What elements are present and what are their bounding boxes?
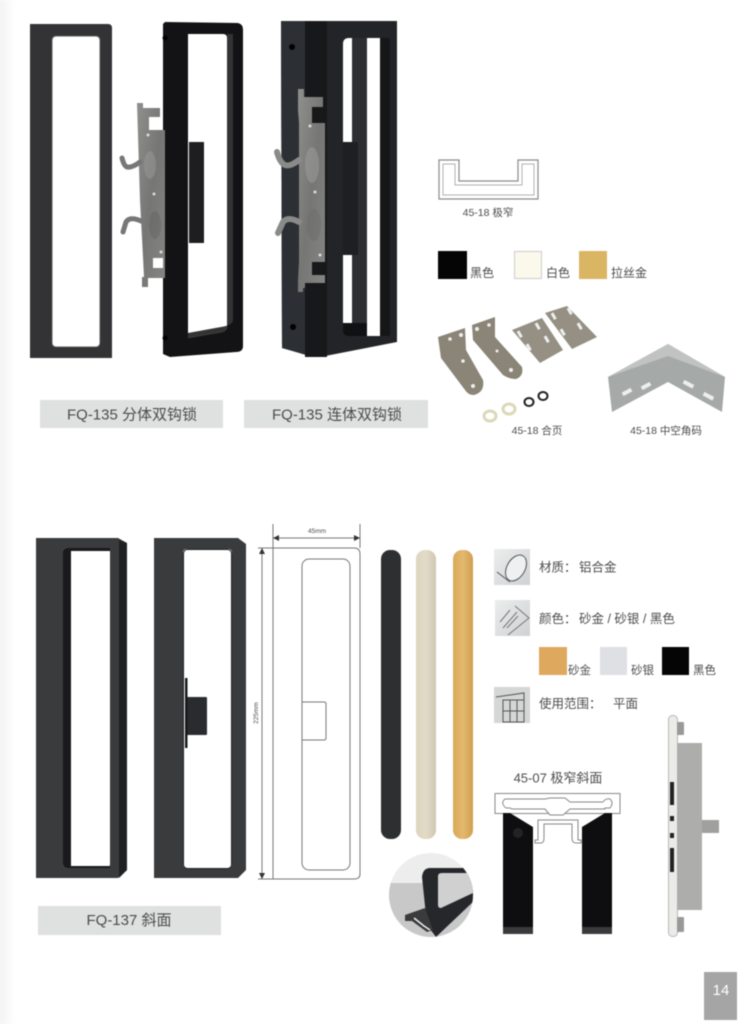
colour swatches: black, white, brushed gold: 白色 <box>546 265 570 280</box>
dimension drawing: 45mm x 225mm <box>253 524 360 879</box>
colour swatches: black, white, brushed gold <box>438 251 647 280</box>
profile drawing: 45-18 extremely narrow <box>439 160 538 219</box>
handle: FQ-135 split outer frame <box>30 24 112 358</box>
dimension drawing: 45mm x 225mm: 45mm <box>308 528 326 535</box>
heading: 45-07 narrow bevel: 45-07 极窄斜面 <box>514 770 602 786</box>
profile drawing: 45-18 extremely narrow: 45-18 极窄 <box>463 206 513 219</box>
washers <box>484 392 548 421</box>
swatches: sand gold, sand silver, black: 砂银 <box>631 663 654 677</box>
icon: material <box>494 549 531 585</box>
page number: 14 <box>713 982 729 999</box>
swatches: sand gold, sand silver, black <box>539 647 716 677</box>
swatches: sand gold, sand silver, black: 黑色 <box>693 663 716 677</box>
label: FQ-137 bevel <box>38 906 221 935</box>
text: scope of use: 平面 <box>613 697 638 711</box>
handle: FQ-137 back view <box>36 538 127 878</box>
swatches: sand gold, sand silver, black: 砂金 <box>568 663 591 677</box>
label: FQ-135 split: FQ-135 分体双钩锁 <box>67 406 197 424</box>
colour swatches: black, white, brushed gold: 拉丝金 <box>611 265 647 280</box>
colour swatches: black, white, brushed gold: 黑色 <box>470 266 494 280</box>
corner bracket: 45-18 hollow corner key <box>608 344 725 412</box>
text: colour: 颜色： <box>539 611 577 626</box>
text: material: 材质： <box>539 560 577 574</box>
caption: 45-18 corner key: 45-18 中空角码 <box>630 424 702 437</box>
caption: 45-18 hinge: 45-18 合页 <box>512 424 562 437</box>
icon: scope of use <box>494 687 530 723</box>
page number <box>704 972 737 1020</box>
label: FQ-135 split <box>40 400 223 428</box>
text: material: 铝合金 <box>579 560 617 574</box>
handle: FQ-137 front view with thumb piece <box>154 538 246 878</box>
hinge parts <box>438 306 597 395</box>
cross-section: 45-07 <box>495 794 620 934</box>
lock body: FQ-135 split hook lock <box>122 103 165 287</box>
text: colour <box>539 611 675 626</box>
label: FQ-135 connected <box>244 400 428 428</box>
text: material <box>539 560 617 574</box>
text: colour: 砂金 / 砂银 / 黑色 <box>579 611 675 626</box>
handle: FQ-135 connected frame with lock <box>277 21 397 357</box>
dimension drawing: 45mm x 225mm: 225mm <box>253 702 260 724</box>
detail circle photo <box>388 853 474 938</box>
text: scope of use <box>539 696 638 711</box>
text: scope of use: 使用范围： <box>539 696 602 711</box>
lock case <box>668 716 719 936</box>
icon: colour <box>495 600 530 636</box>
label: FQ-135 connected: FQ-135 连体双钩锁 <box>272 406 402 424</box>
finish strips: black, silver, gold <box>381 550 473 839</box>
handle: FQ-135 split inner frame with thumb bar <box>162 22 243 357</box>
label: FQ-137 bevel: FQ-137 斜面 <box>86 912 172 929</box>
